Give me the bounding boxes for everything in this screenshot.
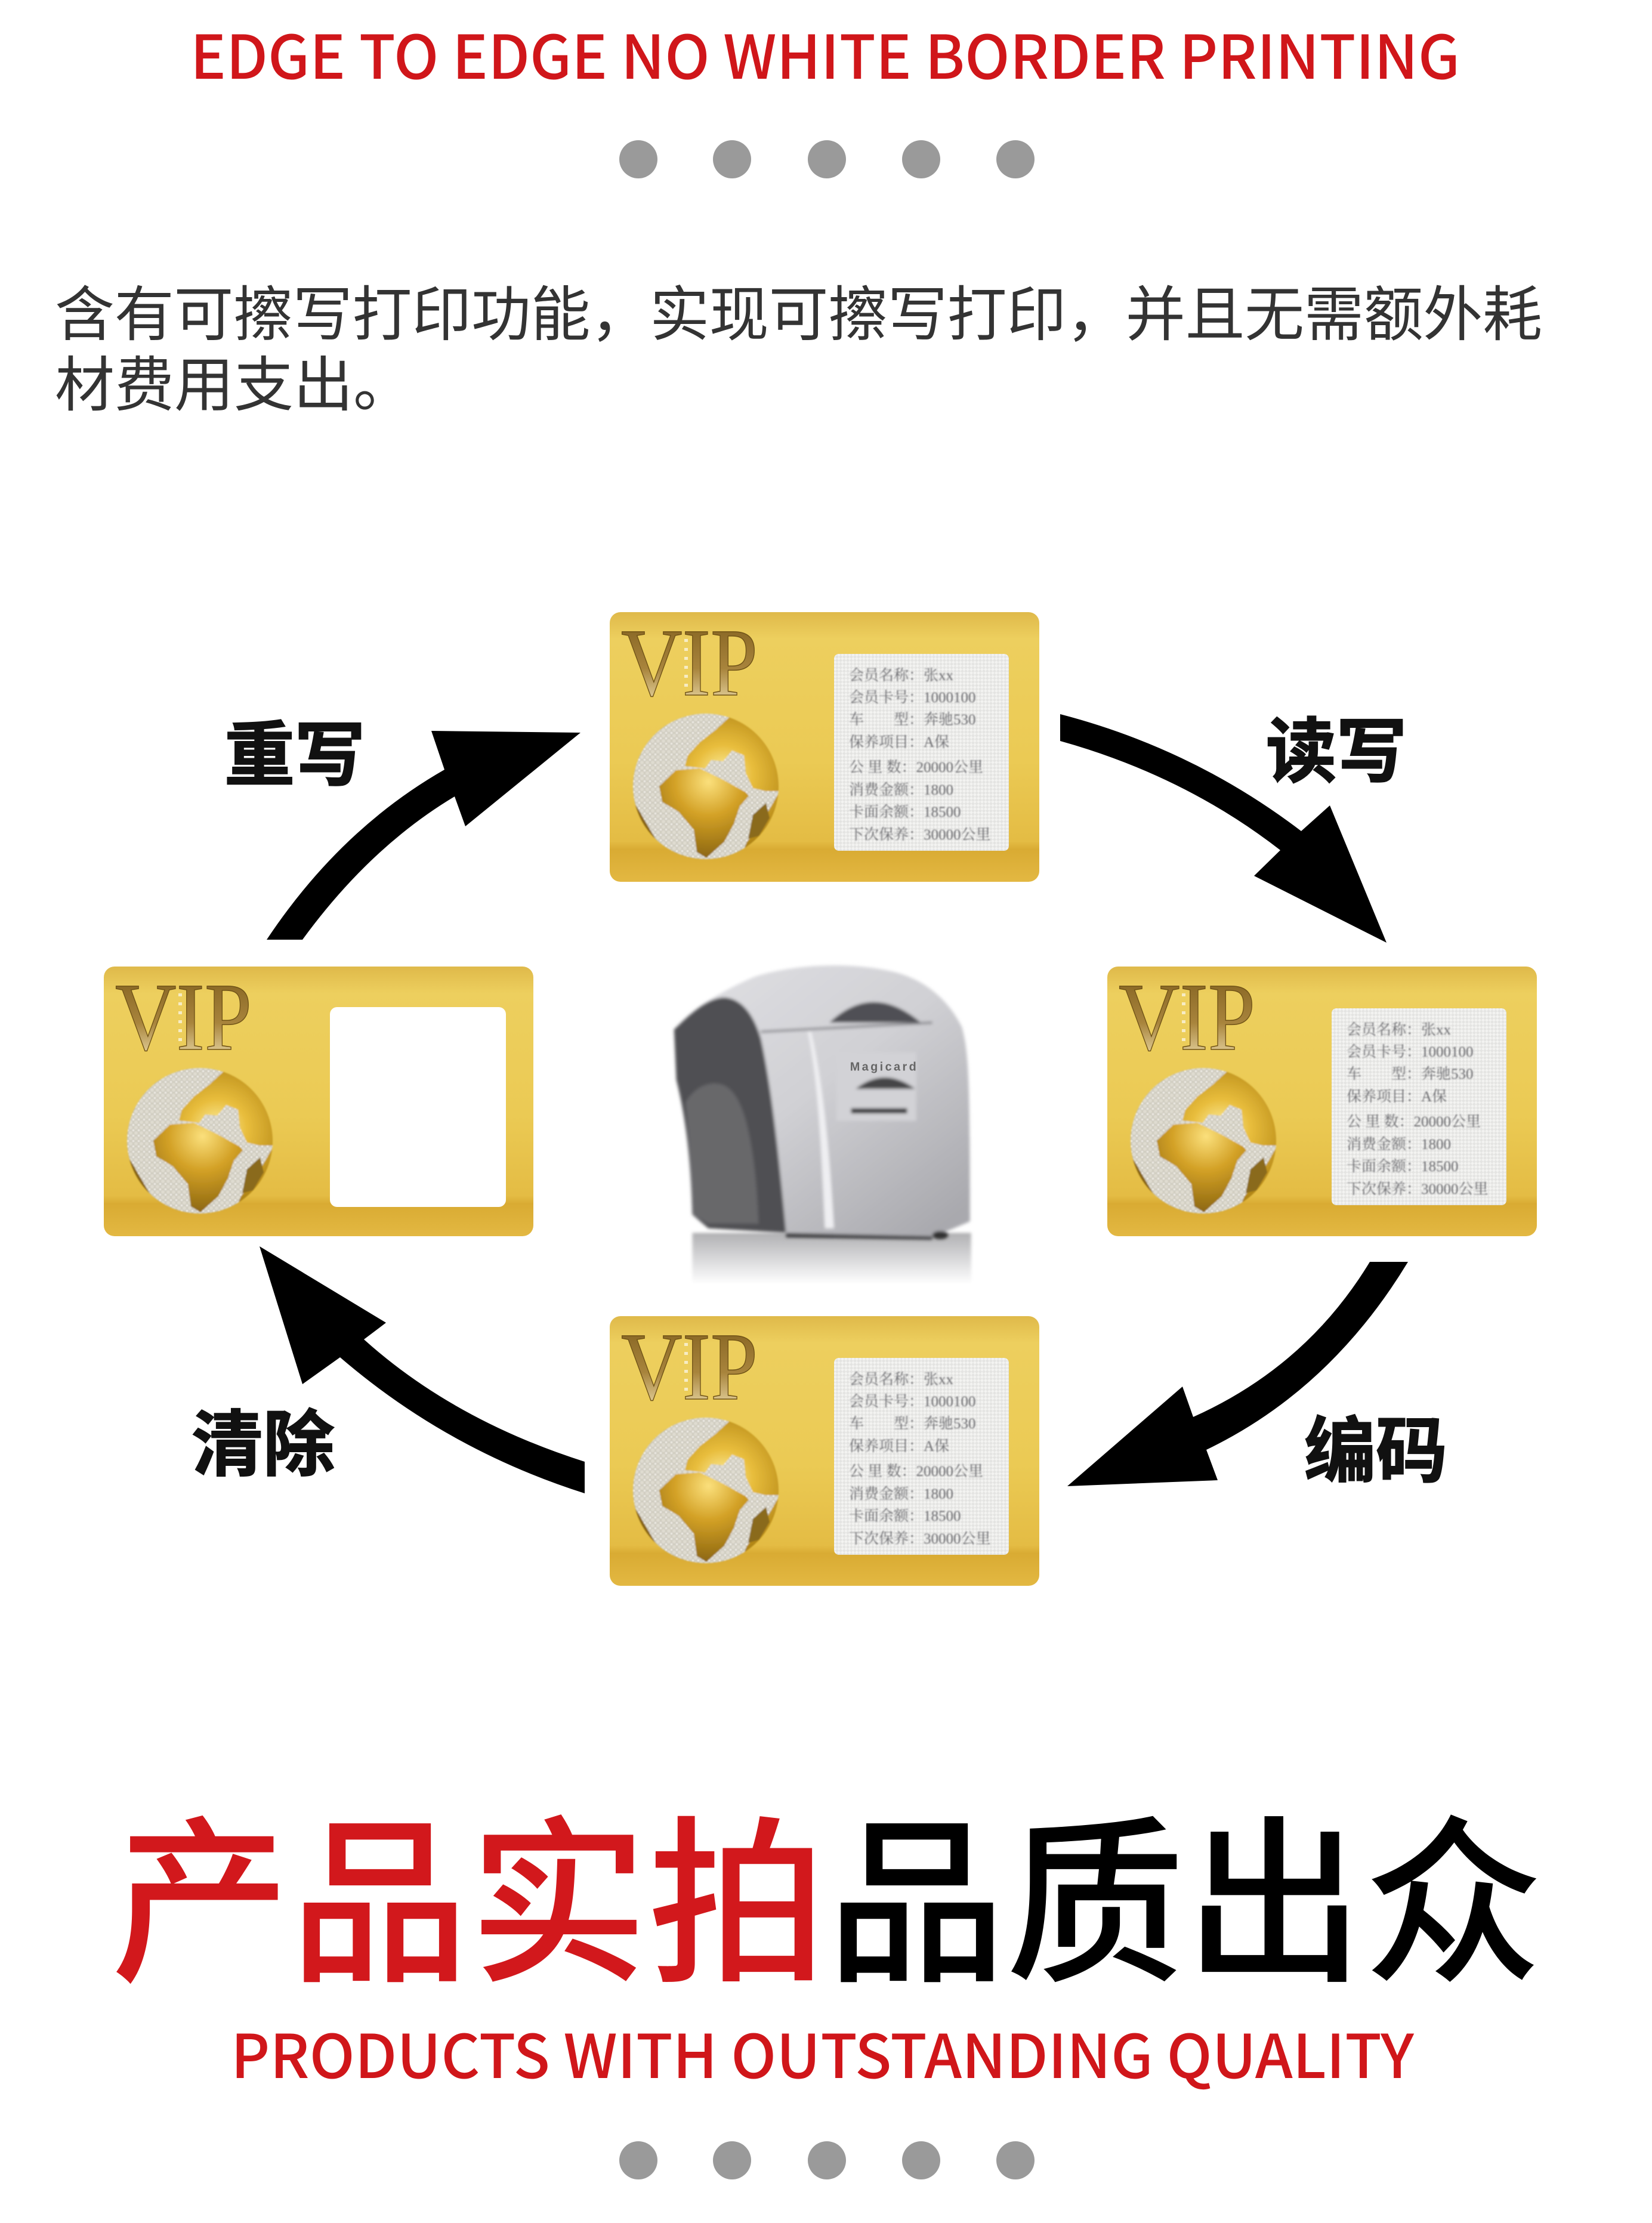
info panel: 卡面余额：18500 xyxy=(849,1508,961,1524)
info panel: 会员卡号：1000100 xyxy=(849,1393,976,1410)
info panel xyxy=(834,654,1009,851)
VIP logo: VIP xyxy=(1119,964,1255,1071)
arrow: bottom to left xyxy=(260,1246,585,1493)
subtitle: outstanding quality: PRODUCTS WITH OUTSTANDING QUALITY xyxy=(231,2009,1415,2096)
info panel xyxy=(834,1358,1009,1555)
globe xyxy=(628,708,780,863)
info panel: 公 里 数：20000公里 xyxy=(1347,1113,1481,1130)
decorative dots: bottom xyxy=(619,2141,1035,2179)
info panel xyxy=(1332,1008,1506,1205)
info panel: 会员卡号：1000100 xyxy=(849,689,976,706)
VIP logo: VIP xyxy=(621,1314,758,1421)
info panel: 保养项目：A保 xyxy=(849,1438,949,1455)
info panel: 公 里 数：20000公里 xyxy=(849,1463,983,1480)
card: right xyxy=(1107,964,1537,1236)
info panel: 会员卡号：1000100 xyxy=(1347,1043,1474,1060)
info panel: 公 里 数：20000公里 xyxy=(849,759,983,776)
printer reflection xyxy=(692,1233,971,1285)
description text xyxy=(55,266,1542,423)
info panel: 会员名称：张xx xyxy=(1347,1021,1452,1038)
info panel: 会员名称：张xx xyxy=(849,1371,954,1388)
info panel: 下次保养：30000公里 xyxy=(1347,1181,1489,1197)
info panel: 车 型：奔驰530 xyxy=(849,1415,976,1432)
label: encode: 编码 xyxy=(1304,1393,1447,1497)
info panel: 消费金额：1800 xyxy=(1347,1136,1451,1153)
decorative dots: top xyxy=(619,140,1035,178)
info panel: 会员名称：张xx xyxy=(849,667,954,684)
label: erase: 清除 xyxy=(192,1387,335,1490)
info panel: 卡面余额：18500 xyxy=(849,804,961,820)
label: read write: 读写 xyxy=(1266,694,1407,796)
info panel: 车 型：奔驰530 xyxy=(1347,1066,1474,1082)
card: top xyxy=(610,610,1039,882)
blank panel xyxy=(330,1007,506,1207)
VIP logo: VIP xyxy=(115,964,252,1071)
info panel: 下次保养：30000公里 xyxy=(849,826,991,843)
globe xyxy=(1125,1062,1277,1217)
description text: 含有可擦写打印功能，实现可擦写打印，并且无需额外耗 xyxy=(55,266,1542,353)
info panel: 保养项目：A保 xyxy=(849,734,949,751)
printer logo: Magicard xyxy=(850,1060,916,1073)
card: left, blank erased xyxy=(104,964,533,1236)
info panel: 车 型：奔驰530 xyxy=(849,711,976,728)
info panel: 保养项目：A保 xyxy=(1347,1088,1447,1105)
info panel: 消费金额：1800 xyxy=(849,782,953,798)
arrow: right to bottom xyxy=(1067,1262,1408,1486)
heading: product photos: 产品实拍品质出众 xyxy=(111,1760,1543,2019)
title: edge to edge: EDGE TO EDGE NO WHITE BORDER PRINTING xyxy=(190,10,1460,97)
arrow: left to top xyxy=(267,731,580,940)
description text: 材费用支出。 xyxy=(55,336,413,423)
label: rewrite: 重写 xyxy=(224,698,365,800)
info panel: 下次保养：30000公里 xyxy=(849,1530,991,1547)
globe xyxy=(628,1412,780,1567)
globe xyxy=(122,1062,274,1217)
VIP logo: VIP xyxy=(621,610,758,717)
printer xyxy=(674,965,971,1285)
panel: card cycle diagram xyxy=(104,610,1537,1586)
info panel: 卡面余额：18500 xyxy=(1347,1158,1459,1175)
arrow: top to right xyxy=(1060,714,1387,943)
info panel: 消费金额：1800 xyxy=(849,1486,953,1502)
card: bottom xyxy=(610,1314,1039,1586)
